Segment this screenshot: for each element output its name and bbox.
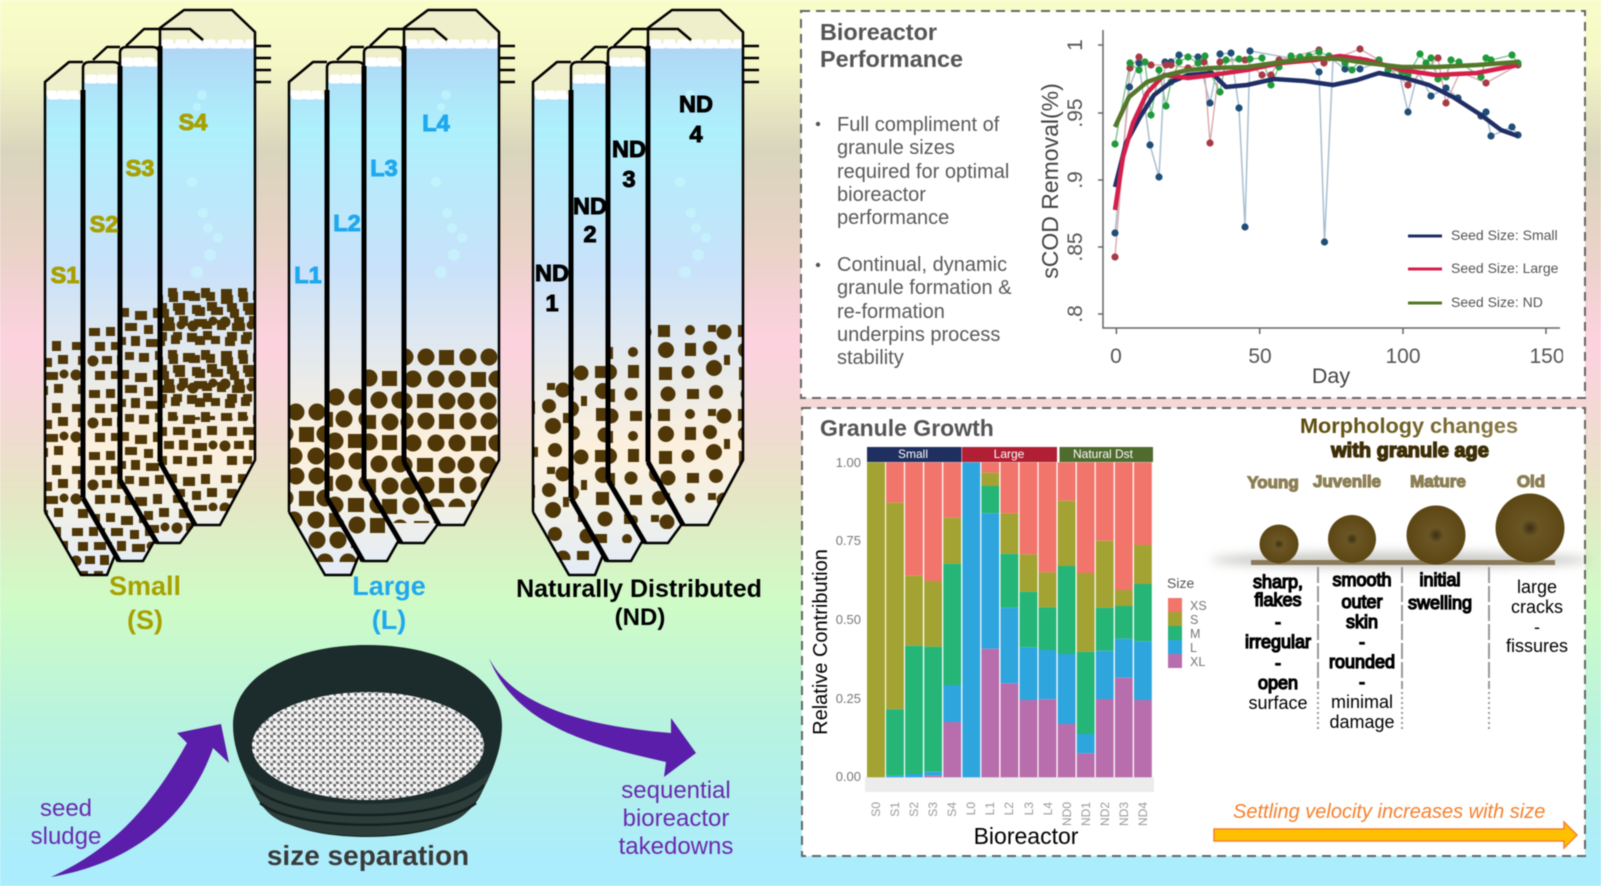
bullet text: bioreactor <box>837 184 926 206</box>
column text: juvenile: - <box>1359 632 1365 652</box>
reactor labels S1-S4: S3 <box>126 155 154 181</box>
column text: juvenile: smooth <box>1332 570 1392 590</box>
reactor ND4 <box>571 10 759 561</box>
chart legend: Seed Size: ND <box>1451 294 1543 310</box>
reactor L4 <box>327 10 515 561</box>
line chart: sCOD removal: .8 <box>1064 305 1087 323</box>
reactor labels L1-L4: L4 <box>422 110 450 136</box>
reactor L3 <box>362 44 439 546</box>
x axis ticks: L4 <box>1041 802 1055 815</box>
size legend: M <box>1190 627 1200 641</box>
ground shadow <box>1210 552 1590 568</box>
x axis ticks: L1 <box>983 802 997 815</box>
bullet text: performance <box>837 207 949 229</box>
settling velocity caption: Settling velocity increases with size <box>1233 801 1545 823</box>
group label ND: (ND) <box>615 604 665 631</box>
stage labels: Mature <box>1410 472 1466 491</box>
size legend: XS <box>1190 599 1207 613</box>
label sequential bioreactor takedowns: sequential <box>621 777 731 804</box>
line chart: sCOD removal: 1 <box>1064 39 1087 51</box>
reactor L1 <box>284 62 364 586</box>
column text: old: cracks <box>1511 597 1563 617</box>
column text: young: open <box>1258 673 1298 693</box>
chart legend: Seed Size: Large <box>1451 260 1559 276</box>
label seed sludge: seed <box>40 795 92 822</box>
reactor labels S1-S4: S2 <box>90 211 118 237</box>
smooth trend: nd <box>1115 58 1518 127</box>
reactor labels ND1-ND4: 3 <box>622 166 636 192</box>
column text: juvenile: minimal <box>1331 692 1393 712</box>
column text: juvenile: skin <box>1346 612 1378 632</box>
arrow: sieve to takedowns <box>489 658 696 777</box>
stage labels: Old <box>1517 472 1545 491</box>
line chart: sCOD removal: 100 <box>1385 345 1421 368</box>
x axis ticks: S1 <box>888 802 902 817</box>
morphology title: Morphology changes <box>1300 413 1518 438</box>
reactor labels L1-L4: L1 <box>294 262 322 288</box>
granule: juvenile <box>1328 515 1376 563</box>
column text: mature: swelling <box>1408 593 1472 613</box>
column text: young: irregular <box>1245 632 1311 652</box>
column text: young: sharp, <box>1253 572 1303 592</box>
bars <box>867 462 1152 777</box>
bullet text <box>816 114 1012 369</box>
x axis ticks: ND3 <box>1117 802 1131 826</box>
reactor S2 <box>80 60 155 564</box>
column text: old: large <box>1517 577 1557 597</box>
group label L: (L) <box>372 605 406 635</box>
label sequential bioreactor takedowns: takedowns <box>619 833 733 860</box>
size legend <box>1167 575 1207 669</box>
bullet text: re-formation <box>837 301 945 323</box>
stacked bar chart <box>810 447 1154 849</box>
line chart: sCOD removal: .9 <box>1064 171 1087 189</box>
line chart: sCOD removal <box>1037 30 1565 388</box>
size legend: L <box>1190 641 1197 655</box>
facet strips: Natural Dst <box>1073 447 1134 461</box>
heading: Granule Growth <box>820 415 994 441</box>
stage labels <box>1247 472 1545 492</box>
reactor L2 <box>324 60 399 564</box>
column text: young: - <box>1275 612 1281 632</box>
reactor ND1 <box>530 60 604 578</box>
reactor labels ND1-ND4: 2 <box>583 221 597 247</box>
x axis ticks: S3 <box>926 802 940 817</box>
reactor labels ND1-ND4: ND <box>573 193 607 219</box>
x axis ticks: S2 <box>907 802 921 817</box>
column text: young: - <box>1275 653 1281 673</box>
column text: young: flakes <box>1254 590 1302 610</box>
morphology section <box>1210 413 1590 732</box>
chart legend <box>1408 227 1559 310</box>
label size separation: size separation <box>267 840 469 871</box>
x axis title: Bioreactor <box>974 823 1079 849</box>
column text: juvenile <box>1329 570 1395 732</box>
label seed sludge: sludge <box>31 823 101 850</box>
column text: mature <box>1408 570 1472 613</box>
line chart: sCOD removal: .85 <box>1064 232 1087 262</box>
settling velocity arrow <box>1214 822 1577 848</box>
line chart: sCOD removal: sCOD Removal(%) <box>1037 83 1063 279</box>
bullet text: underpins process <box>837 324 1000 346</box>
heading: Bioreactor <box>820 19 937 45</box>
group label large: Large <box>352 571 426 601</box>
reactor S4 <box>83 10 271 561</box>
reactor S3 <box>118 44 195 546</box>
x axis ticks: L2 <box>1002 802 1016 815</box>
naturally distributed reactors <box>528 10 759 586</box>
panel: bioreactor performance <box>801 11 1585 398</box>
large series points <box>1111 45 1522 261</box>
bullet text: required for optimal <box>837 161 1009 183</box>
line chart: sCOD removal: 150 <box>1529 345 1565 368</box>
column dividers <box>1318 567 1489 732</box>
reactor labels ND1-ND4: 1 <box>545 290 559 316</box>
x axis ticks: ND2 <box>1098 802 1112 826</box>
group label S: (S) <box>127 605 163 635</box>
y axis ticks <box>836 455 861 784</box>
facet strips: Small <box>898 447 928 461</box>
line chart: sCOD removal: 0 <box>1110 345 1122 368</box>
reactor labels S1-S4: S4 <box>179 109 207 135</box>
size legend: S <box>1190 613 1198 627</box>
column text: juvenile: outer <box>1341 592 1383 612</box>
heading: Performance <box>820 46 963 72</box>
sieve icon <box>233 645 502 837</box>
stage labels: Juvenile <box>1313 472 1381 491</box>
y axis ticks: 0.75 <box>836 533 861 548</box>
line chart: sCOD removal: Day <box>1312 364 1350 388</box>
panel: granule growth <box>802 408 1590 856</box>
group label small: Small <box>109 571 181 601</box>
y axis ticks: 0.00 <box>836 769 861 784</box>
size legend: Size <box>1167 575 1194 591</box>
reactor labels L1-L4 <box>294 110 450 288</box>
reactor labels ND1-ND4: ND <box>612 136 646 162</box>
facet strips: Large <box>994 447 1025 461</box>
bullet text: Continual, dynamic <box>837 254 1007 276</box>
label sequential bioreactor takedowns: bioreactor <box>623 805 729 832</box>
reactor ND2 <box>568 60 643 564</box>
column text: young <box>1245 572 1311 713</box>
line chart: sCOD removal: 50 <box>1248 345 1272 368</box>
reactor labels ND1-ND4 <box>535 91 713 316</box>
ground line <box>1251 560 1555 565</box>
bullet text: granule sizes <box>837 137 955 159</box>
reactor labels S1-S4: S1 <box>51 262 79 288</box>
nd series points <box>1111 48 1522 148</box>
reactor labels L1-L4: L3 <box>370 155 398 181</box>
smooth trend: large <box>1115 56 1518 210</box>
x axis ticks: S4 <box>945 802 959 817</box>
y axis title: Relative Contribution <box>810 549 832 735</box>
x axis ticks: L0 <box>964 802 978 815</box>
small seed reactors <box>40 10 271 586</box>
bullet text: Full compliment of <box>837 114 1000 136</box>
column text: juvenile: - <box>1359 672 1365 692</box>
group label naturally distributed: Naturally Distributed <box>516 575 762 603</box>
large seed reactors <box>284 10 515 586</box>
arrow: seed sludge into sieve <box>51 724 229 877</box>
x axis ticks <box>869 802 1150 826</box>
x axis ticks: ND4 <box>1136 802 1150 826</box>
size legend: XL <box>1190 655 1205 669</box>
column text: young: surface <box>1248 693 1308 713</box>
reactor S1 <box>40 62 120 586</box>
morphology subtitle: with granule age <box>1330 440 1489 462</box>
column text: juvenile: damage <box>1329 712 1395 732</box>
granule: young <box>1260 524 1298 564</box>
bullet text: granule formation & <box>837 277 1012 299</box>
reactor labels ND1-ND4: ND <box>679 91 713 117</box>
y axis ticks: 0.50 <box>836 612 861 627</box>
x axis ticks: ND0 <box>1060 802 1074 826</box>
granule: old <box>1496 494 1564 562</box>
stage labels: Young <box>1247 473 1299 492</box>
x axis ticks: ND1 <box>1079 802 1093 826</box>
y axis ticks: 0.25 <box>836 691 861 706</box>
granule: mature <box>1406 506 1466 564</box>
bullet text: stability <box>837 347 904 369</box>
reactor labels L1-L4: L2 <box>333 210 361 236</box>
reactor labels S1-S4 <box>51 109 207 288</box>
y axis ticks: 1.00 <box>836 455 861 470</box>
thin data lines <box>1115 51 1518 242</box>
column text: old <box>1506 577 1568 656</box>
small series points <box>1111 47 1522 246</box>
column text: juvenile: rounded <box>1329 652 1395 672</box>
column text: mature: initial <box>1419 570 1461 590</box>
reactor ND3 <box>606 44 683 546</box>
x axis ticks: L3 <box>1022 802 1036 815</box>
reactor labels ND1-ND4: ND <box>535 260 569 286</box>
smooth trend: small <box>1115 73 1518 187</box>
x axis ticks: S0 <box>869 802 883 817</box>
chart legend: Seed Size: Small <box>1451 227 1558 243</box>
line chart: sCOD removal: .95 <box>1064 98 1087 128</box>
facet strips <box>867 447 1153 462</box>
reactor labels ND1-ND4: 4 <box>689 121 703 147</box>
column text: old: - <box>1534 617 1540 637</box>
column text: old: fissures <box>1506 636 1568 656</box>
